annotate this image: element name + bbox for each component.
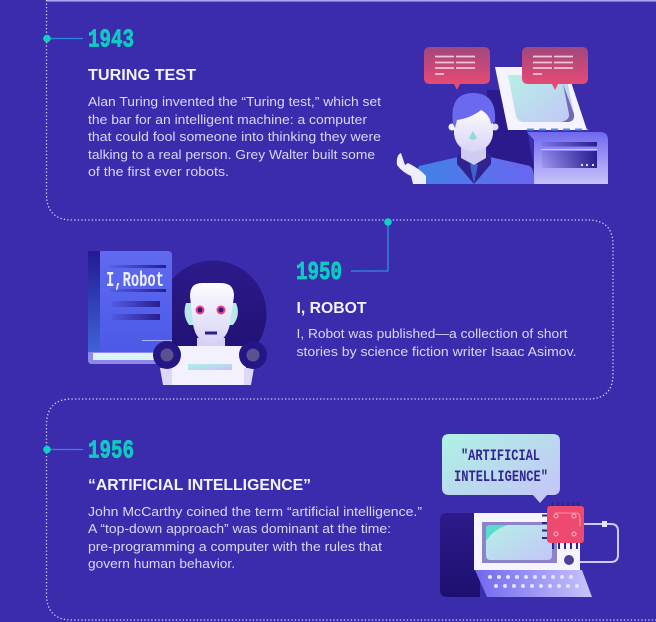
- body text: I, Robot: stories by science fiction writer Isaac Asimov.: [296, 345, 576, 359]
- man neck: [461, 140, 486, 165]
- man shoulders: [413, 152, 534, 184]
- icon: computer with chip and speech bubble: [440, 434, 618, 597]
- computer body: [474, 513, 580, 570]
- robot eyes: [196, 306, 224, 314]
- body text: Turing Test: Alan Turing invented the “Turing test,” which set: [88, 95, 382, 109]
- man face: [454, 108, 493, 152]
- red chip: [542, 502, 584, 549]
- cable: [572, 524, 618, 562]
- body text: Turing Test: the bar for an intelligent machine: a computer: [88, 113, 367, 127]
- robot neck: [197, 338, 225, 350]
- year marker 1950: [351, 218, 392, 271]
- body text: Turing Test: talking to a real person. Grey Walter built some: [88, 148, 375, 162]
- body text: Turing Test: that could fool someone into thinking they were: [88, 130, 381, 144]
- section: 1956 Artificial Intelligence: [43, 434, 618, 597]
- heading: Turing Test: TURING TEST: [88, 67, 197, 84]
- robot mouth: [205, 332, 217, 334]
- body text: Artificial Intelligence: pre-programming a computer with the rules that: [88, 540, 383, 554]
- year marker 1943: [43, 35, 83, 42]
- top divider line: [47, 0, 656, 2]
- icon: book and robot: [88, 251, 267, 385]
- man collar and tie: [457, 152, 491, 184]
- computer dark back: [440, 513, 480, 597]
- man ears: [448, 124, 456, 130]
- year marker 1956: [43, 446, 83, 453]
- body text: Artificial Intelligence: A “top-down approach” was dominant at the time:: [88, 522, 391, 536]
- body text: Turing Test: [88, 95, 382, 179]
- speech bubble text: "ARTIFICIAL: [461, 447, 540, 465]
- man nose: [469, 131, 477, 140]
- speech bubble: [442, 434, 560, 503]
- icon: man, speech bubbles and computer: [397, 47, 608, 184]
- body text: Artificial Intelligence: govern human behavior.: [88, 557, 235, 571]
- body text: I, Robot: I, Robot was published—a collection of short: [296, 327, 568, 341]
- keyboard: [475, 570, 592, 597]
- body text: Turing Test: of the first ever robots.: [88, 165, 229, 179]
- year 1950: 1950: [296, 257, 342, 287]
- robot body: [172, 346, 246, 385]
- section: 1943 Turing Test: [43, 24, 608, 184]
- speech bubble: INTELLIGENCE": [454, 468, 548, 486]
- speaker dot: [564, 555, 574, 565]
- robot: [153, 283, 267, 385]
- body text: Artificial Intelligence: [88, 505, 422, 571]
- monitor: [495, 67, 587, 130]
- book: [88, 251, 172, 364]
- heading: I, Robot: I, ROBOT: [296, 300, 367, 317]
- computer screen: [482, 522, 557, 563]
- body text: I, Robot: [296, 327, 576, 359]
- book title: I,Robot: [106, 270, 164, 293]
- computer base: [527, 132, 608, 184]
- dark circle behind robot: [160, 260, 266, 368]
- body text: Artificial Intelligence: John McCarthy coined the term “artificial intelligence.”: [88, 505, 422, 519]
- robot shoulders: [153, 341, 181, 369]
- robot head: [190, 283, 234, 343]
- computer lights: [581, 164, 594, 166]
- robot ear pieces: [185, 303, 194, 325]
- year 1943: 1943: [88, 24, 134, 54]
- right speech bubble: [522, 47, 588, 90]
- heading: Artificial Intelligence: “ARTIFICIAL INTELLIGENCE”: [88, 477, 311, 494]
- man hair: [452, 93, 495, 128]
- section: 1950 I, Robot: [88, 218, 576, 385]
- left speech bubble: [424, 47, 490, 90]
- man hand: [397, 153, 426, 184]
- year 1956: 1956: [88, 436, 134, 466]
- dark shadow behind computer: [487, 90, 534, 168]
